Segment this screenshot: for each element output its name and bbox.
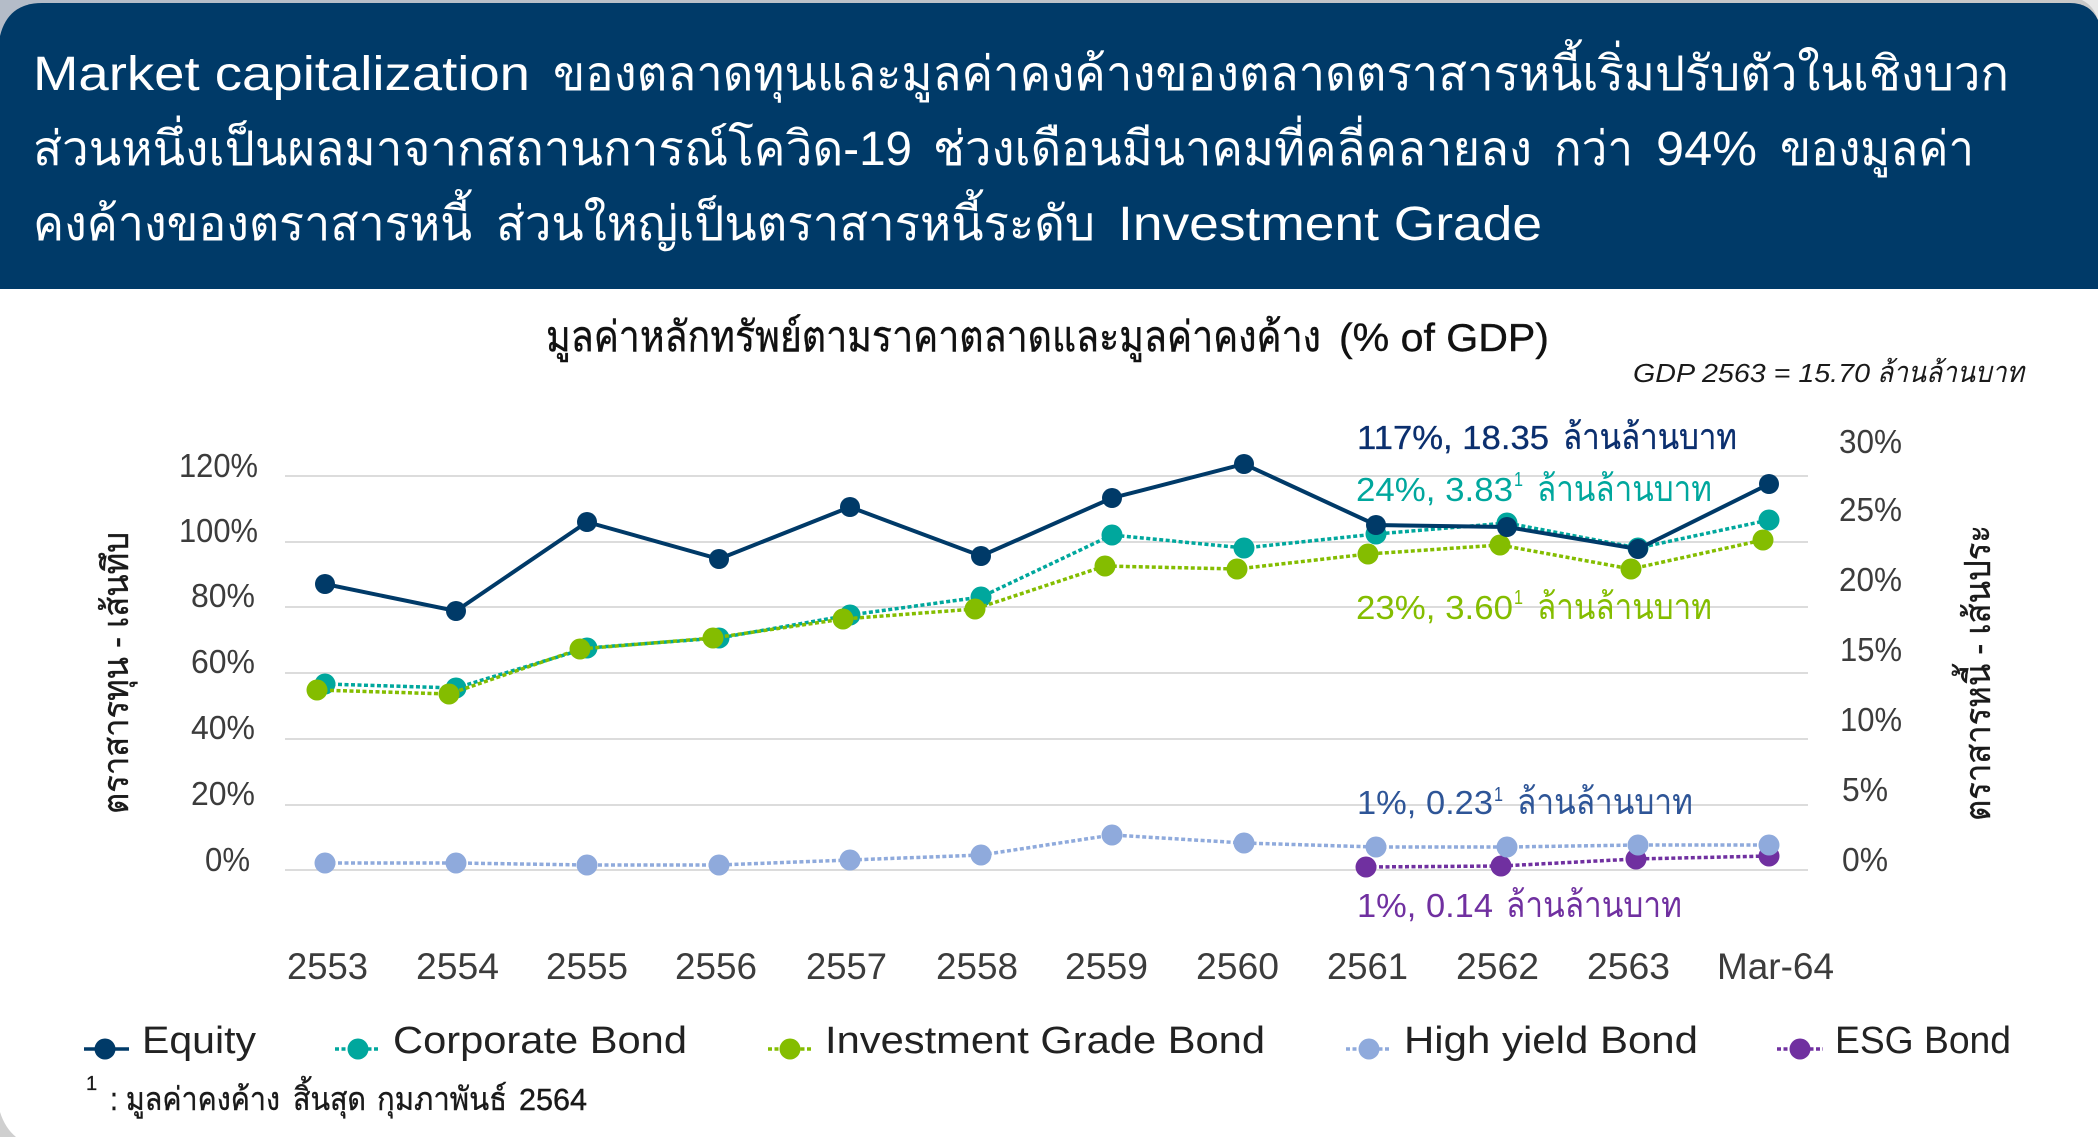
heading: banner text: ของมูลค่า xyxy=(1780,123,1974,178)
series: high yield bond latest markers xyxy=(1366,834,1780,858)
series: investment grade bond xyxy=(306,530,1774,704)
x axis labels: 2563 xyxy=(1587,946,1670,987)
series: corporate bond xyxy=(314,510,1780,698)
heading: banner text: ของตลาดทุนและมูลค่าคงค้างของตลาดตราสารหนี้เริ่มปรับตัวในเชิงบวก xyxy=(553,39,2009,103)
callout: investment grade value xyxy=(1356,586,1712,627)
heading: banner text: ส่วนใหญ่เป็นตราสารหนี้ระดับ xyxy=(496,189,1095,251)
footnote: สิ้นสุด xyxy=(293,1076,366,1119)
heading: banner text: Market capitalization xyxy=(33,48,530,101)
footnote: กุมภาพันธ์ xyxy=(377,1081,507,1119)
right axis labels xyxy=(1839,423,1902,878)
left axis labels xyxy=(179,447,258,878)
right axis labels: 25% xyxy=(1839,491,1902,528)
left axis title: ตราสารทุน - เส้นทึบ xyxy=(95,532,138,814)
x axis labels: 2553 xyxy=(287,946,368,987)
footnote: : มูลค่าคงค้าง xyxy=(110,1081,280,1119)
callout: high yield value: 1 xyxy=(1494,784,1503,806)
x axis labels: 2555 xyxy=(546,946,628,987)
GDP note: GDP 2563 = 15.70 xyxy=(1633,358,1871,388)
legend item: equity xyxy=(84,1020,256,1062)
legend item: ESG bond: ESG Bond xyxy=(1835,1020,2011,1062)
heading: banner text: กว่า xyxy=(1554,123,1633,176)
callout: investment grade value: ล้านล้านบาท xyxy=(1537,586,1712,627)
legend item: high yield bond: High yield Bond xyxy=(1404,1020,1698,1062)
x axis labels: 2562 xyxy=(1456,946,1539,987)
right axis labels: 30% xyxy=(1839,423,1902,460)
footnote: 2564 xyxy=(519,1082,587,1117)
callout: corporate bond value: 24%, 3.83 xyxy=(1356,471,1513,508)
callout: investment grade value: 1 xyxy=(1514,587,1523,609)
footnote xyxy=(86,1073,587,1119)
x axis labels xyxy=(287,946,1834,987)
callout: equity value: 117%, 18.35 xyxy=(1357,419,1549,456)
left axis labels: 20% xyxy=(191,775,255,812)
footnote: 1 xyxy=(86,1073,97,1095)
x axis labels: 2557 xyxy=(806,946,887,987)
series: high yield bond xyxy=(314,824,1769,876)
callout: high yield value xyxy=(1357,781,1693,822)
callout: high yield value: ล้านล้านบาท xyxy=(1517,781,1693,822)
GDP note: ล้านล้านบาท xyxy=(1877,357,2026,389)
callout: corporate bond value: ล้านล้านบาท xyxy=(1537,468,1712,509)
callout: ESG value: 1%, 0.14 xyxy=(1357,887,1493,924)
legend xyxy=(84,1020,2011,1062)
series: equity xyxy=(315,454,1779,621)
right axis labels: 10% xyxy=(1840,701,1902,738)
x axis labels: 2559 xyxy=(1065,946,1148,987)
x axis labels: 2556 xyxy=(675,946,757,987)
heading: banner text xyxy=(33,39,2009,251)
callout: high yield value: 1%, 0.23 xyxy=(1357,784,1493,821)
callout: ESG value: ล้านล้านบาท xyxy=(1506,884,1682,925)
callout: corporate bond value xyxy=(1356,468,1712,509)
right axis labels: 0% xyxy=(1842,841,1888,878)
left axis labels: 100% xyxy=(179,512,258,549)
chart title: (% of GDP) xyxy=(1339,317,1549,360)
heading: banner text: Investment Grade xyxy=(1118,198,1542,251)
left axis labels: 40% xyxy=(191,709,255,746)
heading: banner text: ส่วนหนึ่งเป็นผลมาจากสถานการณ์โควิด-19 xyxy=(33,115,912,176)
x axis labels: 2560 xyxy=(1196,946,1279,987)
callout: equity value: ล้านล้านบาท xyxy=(1563,416,1737,457)
callout: ESG value xyxy=(1357,884,1682,925)
chart title: มูลค่าหลักทรัพย์ตามราคาตลาดและมูลค่าคงค้าง xyxy=(546,313,1321,362)
GDP note xyxy=(1633,357,2026,389)
right axis labels: 20% xyxy=(1839,561,1902,598)
series: ESG bond xyxy=(1356,846,1780,878)
left axis labels: 0% xyxy=(205,841,250,878)
heading: banner text: ช่วงเดือนมีนาคมที่คลี่คลายลง xyxy=(933,115,1532,176)
right axis labels: 5% xyxy=(1842,771,1888,808)
callout: equity value xyxy=(1357,416,1737,457)
legend item: equity: Equity xyxy=(142,1020,256,1062)
left axis labels: 60% xyxy=(191,643,255,680)
line chart xyxy=(95,416,1998,987)
x axis labels: 2561 xyxy=(1327,946,1408,987)
right axis title: ตราสารหนี้ - เส้นประ xyxy=(1951,525,1998,821)
x axis labels: 2554 xyxy=(416,946,499,987)
callout: corporate bond value: 1 xyxy=(1514,469,1523,491)
heading: banner text: 94% xyxy=(1656,123,1757,176)
legend item: investment grade bond: Investment Grade Bond xyxy=(825,1020,1265,1062)
left axis labels: 120% xyxy=(179,447,258,484)
callout: investment grade value: 23%, 3.60 xyxy=(1356,589,1513,626)
x axis labels: 2558 xyxy=(936,946,1018,987)
panel: header banner xyxy=(0,3,2098,289)
heading: banner text: คงค้างของตราสารหนี้ xyxy=(33,189,472,251)
x axis labels: Mar-64 xyxy=(1717,946,1834,987)
right axis labels: 15% xyxy=(1840,631,1902,668)
left axis labels: 80% xyxy=(191,577,255,614)
legend item: corporate bond: Corporate Bond xyxy=(393,1020,687,1062)
